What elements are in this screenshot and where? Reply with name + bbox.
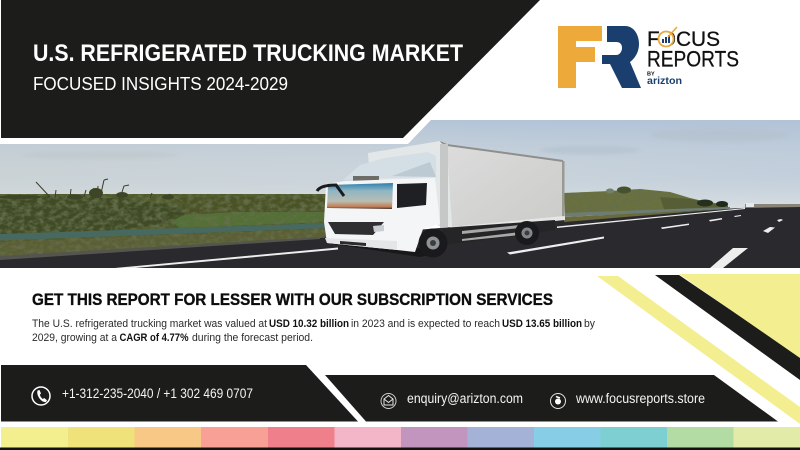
- mirror: [317, 185, 344, 196]
- guardrail left: [0, 223, 330, 240]
- bumper: [325, 238, 397, 250]
- yellow triangle: [679, 274, 800, 358]
- subtitle: FOCUSED INSIGHTS 2024-2029: [33, 73, 288, 94]
- headlight: [373, 225, 384, 232]
- phone numbers: +1-312-235-2040 / +1 302 469 0707: [62, 386, 253, 401]
- title: U.S. REFRIGERATED TRUCKING MARKET: [33, 40, 463, 67]
- black stripe: [655, 275, 800, 380]
- text block: market summary: The U.S. refrigerated trucking market was valued at: [32, 318, 268, 330]
- text block: market summary: CAGR of 4.77%: [120, 332, 188, 344]
- road surface: [0, 207, 800, 268]
- roof fairing: [343, 152, 436, 180]
- text block: market summary: [32, 318, 595, 344]
- front wheel: [418, 228, 448, 258]
- text block: market summary: by: [584, 318, 595, 330]
- logo wordmark: REPORTS: [647, 46, 739, 72]
- email address: enquiry@arizton.com: [407, 391, 523, 406]
- yellow stripe: [597, 276, 800, 424]
- text block: market summary: USD 10.32 billion: [269, 318, 349, 330]
- logo letter F: [558, 26, 602, 88]
- cargo box side: [447, 144, 565, 227]
- icon: email: [381, 394, 396, 408]
- photo: refrigerated truck on highway: [0, 120, 800, 268]
- truck: [317, 141, 565, 258]
- heading: subscription offer: GET THIS REPORT FOR LESSER WITH OUR SUBSCRIPTION SERVICES: [32, 290, 553, 309]
- logo arizton name: arizton: [647, 75, 682, 87]
- text block: market summary: in 2023 and is expected to reach: [351, 318, 500, 330]
- icon: website: [550, 394, 566, 408]
- decorative diagonals: [597, 274, 800, 424]
- grille: [328, 222, 384, 235]
- windshield: [327, 183, 393, 209]
- panel: title banner: [1, 0, 540, 138]
- text block: market summary: USD 13.65 billion: [502, 318, 582, 330]
- logo: Focus Reports by Arizton: [558, 26, 739, 88]
- guardrail right: [564, 207, 730, 217]
- logo wordmark: BY: [647, 72, 655, 78]
- website address: www.focusreports.store: [575, 391, 705, 406]
- text block: market summary: during the forecast period.: [192, 332, 313, 344]
- door window: [397, 183, 427, 208]
- logo wordmark: FOCUS: [647, 28, 720, 51]
- panel: phone contact: [1, 365, 358, 422]
- cab: [324, 178, 440, 252]
- bush foliage on horizon: [0, 188, 174, 200]
- sky: [0, 120, 800, 210]
- chassis: [450, 216, 565, 228]
- icon: phone: [32, 387, 50, 405]
- bush stems on horizon: [36, 179, 170, 198]
- roadside field: [0, 194, 326, 256]
- truck shadow: [330, 244, 426, 257]
- cargo box front: [368, 141, 452, 227]
- panel: email and website: [325, 375, 778, 422]
- logo target mark: [658, 27, 677, 46]
- logo letter R: [602, 26, 641, 88]
- rear wheel: [515, 221, 539, 245]
- logo wordmark: [647, 28, 739, 78]
- lane markings: [115, 208, 783, 268]
- distant hill right: [564, 186, 800, 216]
- color band footer: [0, 427, 800, 450]
- text block: market summary: 2029, growing at a: [32, 332, 118, 344]
